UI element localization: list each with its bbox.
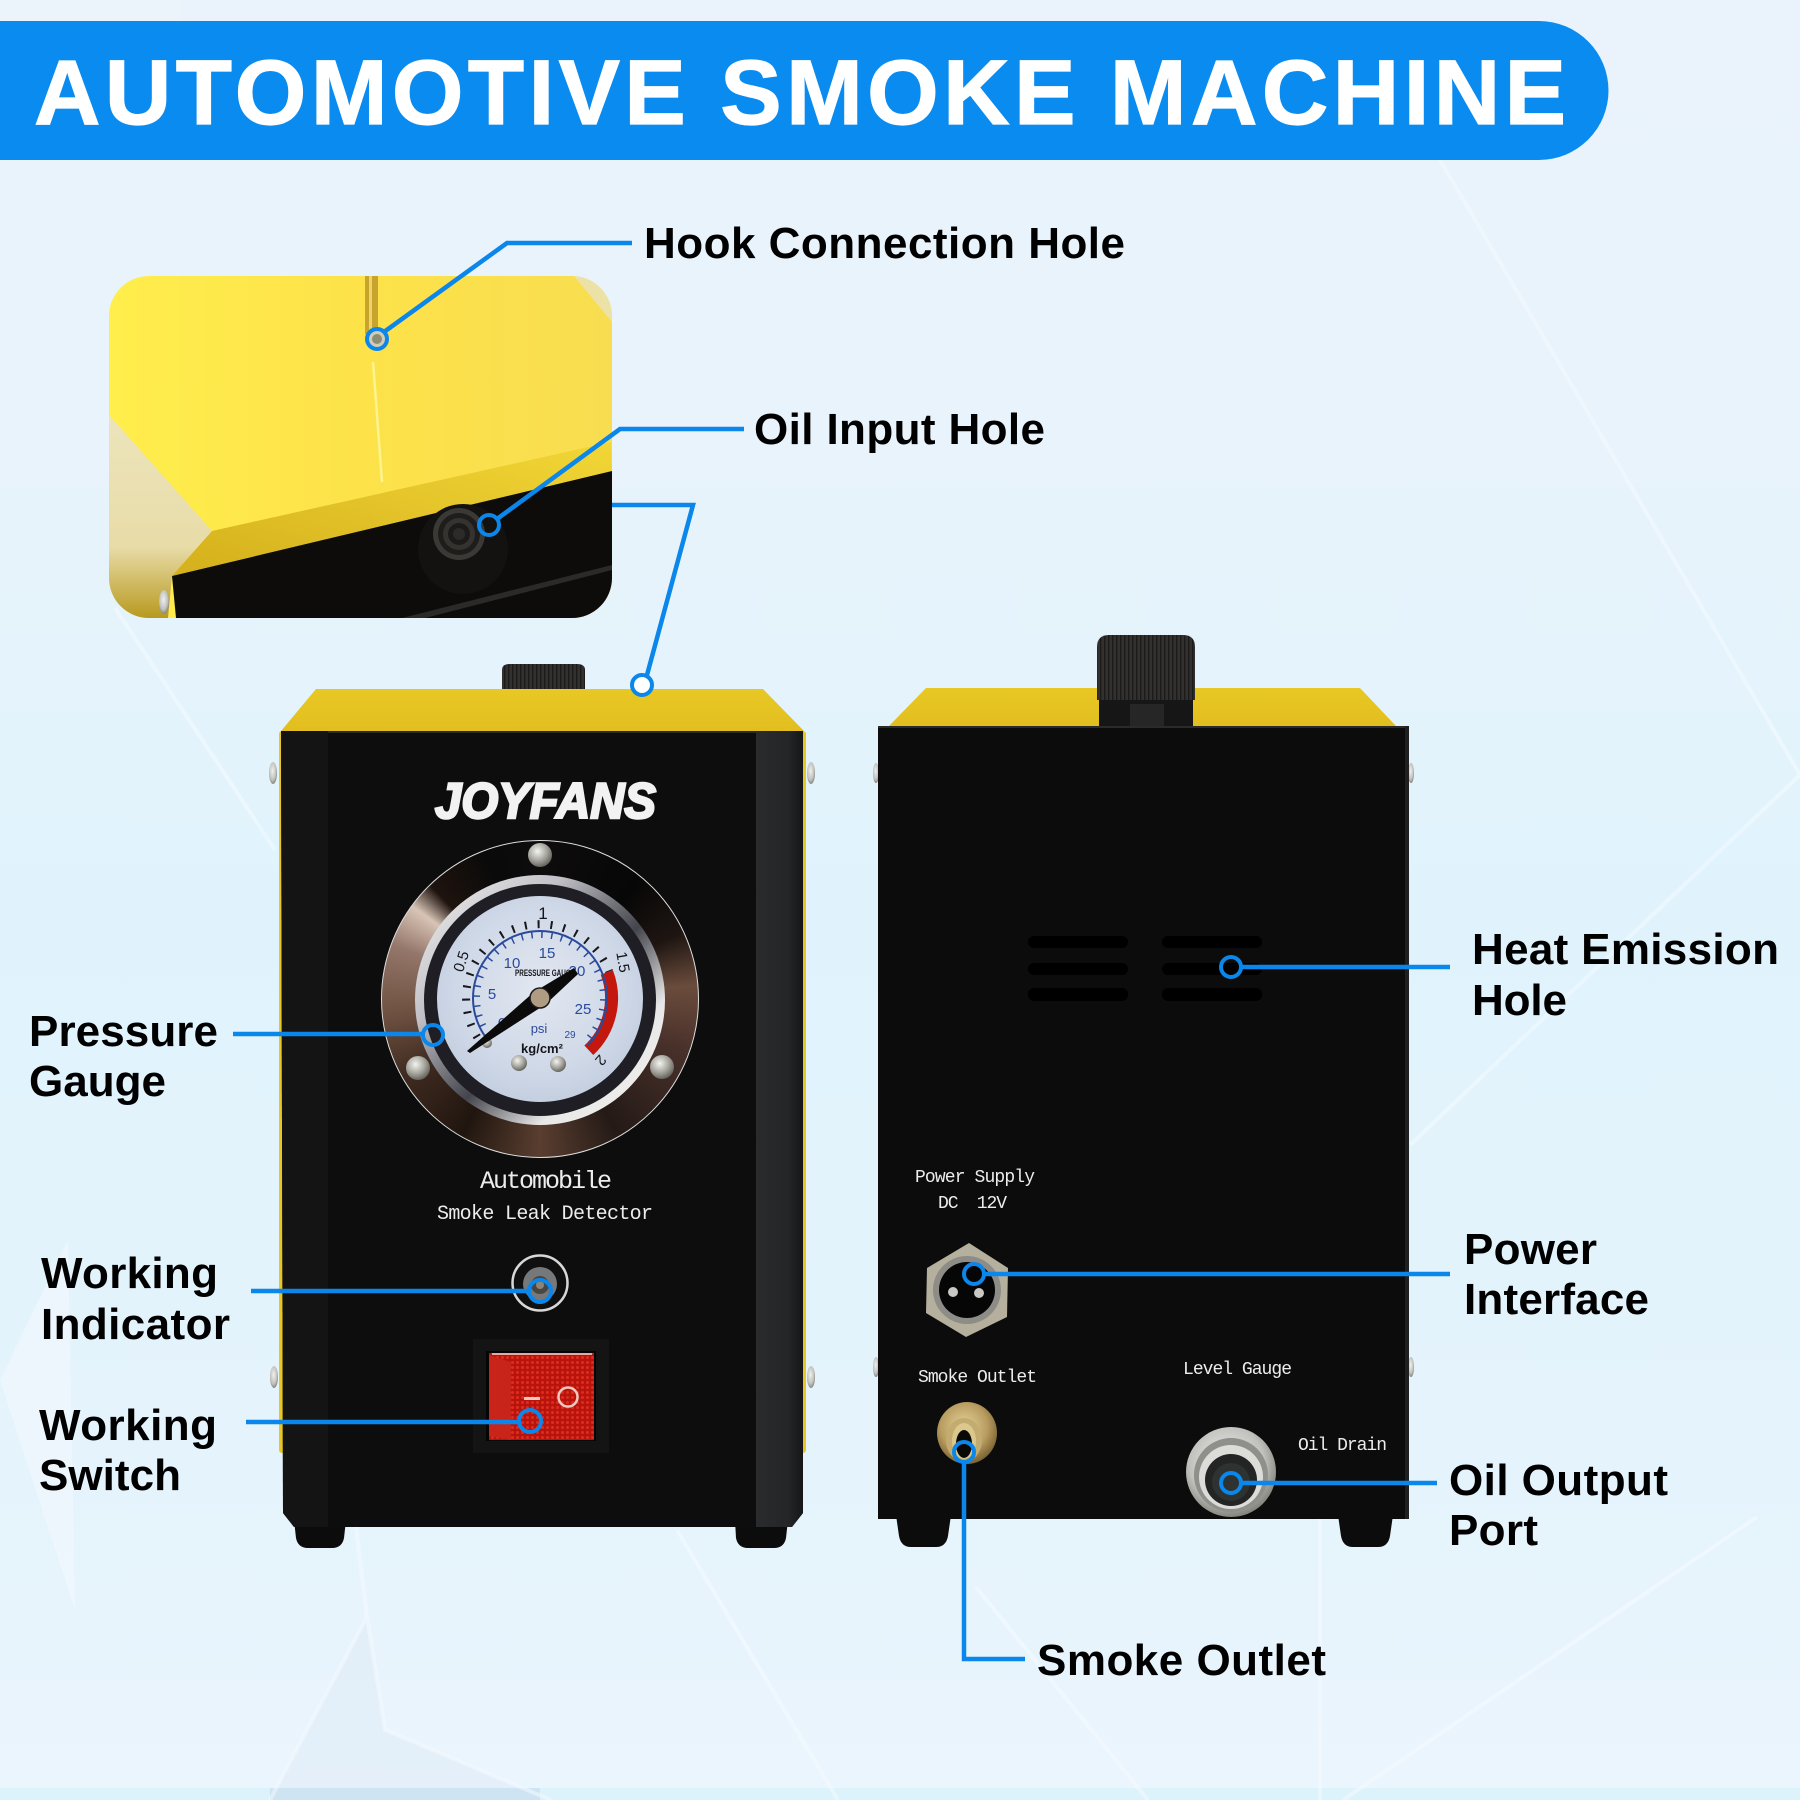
oil output port [1186,1427,1276,1517]
power supply text: Power Supply [915,1168,1035,1188]
working indicator lamp [512,1256,568,1310]
left panel [281,731,328,1527]
smoke outlet text: Smoke Outlet [918,1368,1037,1388]
dial numbers: 1.5 [612,950,633,974]
rocker switch [473,1339,609,1453]
oil drain text: Oil Drain [1298,1436,1387,1456]
connector: inset to machine [612,505,693,695]
callout: working indicator: Working [41,1249,218,1298]
oil input nut [436,504,472,514]
callout: oil output port: Port [1449,1506,1538,1555]
dial numbers [450,904,633,1069]
callout: power interface: Interface [1464,1275,1649,1324]
side screws [873,763,1414,1377]
front text: Automobile [480,1167,612,1196]
body [281,731,803,1527]
knob [1097,635,1195,700]
feet [294,1520,788,1548]
dial numbers: 2 [591,1051,610,1069]
dial numbers: 1 [538,904,548,923]
callout: power interface [964,1225,1649,1324]
callout: smoke outlet [954,1442,1326,1685]
dial numbers: 5 [488,986,496,1003]
callout: oil input hole [479,405,1045,535]
callout: heat emission hole: Heat Emission [1472,925,1779,974]
flange screws [406,843,674,1080]
yellow top cover [281,689,804,731]
left machine: front view [269,664,815,1548]
callout: pressure gauge: Pressure [29,1007,218,1056]
callout: working indicator: Indicator [41,1300,230,1349]
dial face [437,896,643,1102]
hook rod [365,276,378,334]
right machine: rear view: DC 12V [938,1194,1007,1214]
red zone [589,972,612,1050]
callout: hook connection hole: Hook Connection Hole [644,219,1125,268]
black scale [466,924,609,1037]
dial numbers: 25 [575,1001,591,1018]
logo: JOYFANS [435,773,656,829]
right machine: rear view [873,635,1414,1547]
callout: pressure gauge [29,1007,443,1106]
dial numbers: psi [531,1021,547,1036]
right panel [756,731,803,1527]
callout: heat emission hole: Hole [1472,976,1567,1025]
blue scale [473,931,607,1045]
side screws [269,762,815,1388]
title: AUTOMOTIVE SMOKE MACHINE [34,42,1566,144]
callout: working indicator [41,1249,551,1349]
callout: heat emission hole [1221,925,1779,1025]
feet [896,1515,1393,1547]
needle [467,968,578,1053]
brass smoke outlet [937,1402,997,1464]
dial numbers: 20 [569,963,585,980]
callout: working switch [39,1401,541,1500]
callout: oil output port: Oil Output [1449,1456,1668,1505]
screw on inset side [159,590,169,614]
dial numbers: kg/cm² [521,1041,564,1056]
dial screws [482,1038,566,1072]
callout: oil output port [1221,1456,1668,1555]
power connector [926,1243,1008,1337]
title banner [0,21,1608,160]
callout: hook connection hole [367,219,1125,349]
dial numbers: 29 [564,1030,576,1041]
needle hub [530,988,550,1008]
body [878,726,1409,1519]
level gauge text: Level Gauge [1183,1360,1292,1380]
dial numbers: 0 [498,1015,506,1032]
left machine: front view: Smoke Leak Detector [437,1203,653,1226]
callout: power interface: Power [1464,1225,1597,1274]
top knob [502,664,585,689]
callout: working switch: Working [39,1401,217,1450]
pressure gauge [381,840,699,1158]
knob collar [1099,700,1193,726]
bezel ring [415,875,665,1125]
dial numbers: PRESSURE GAUGE [515,968,575,978]
flange [381,840,699,1158]
dial numbers: 15 [539,945,555,962]
heat vents [1028,936,1262,1001]
hook nut [365,331,385,347]
callout: working switch: Switch [39,1451,181,1500]
inset photo: top of the machine [109,276,612,618]
callout: oil input hole: Oil Input Hole [754,405,1045,454]
callout: smoke outlet: Smoke Outlet [1037,1636,1326,1685]
dial numbers: 10 [504,955,520,972]
yellow top cover [889,688,1396,726]
callout: pressure gauge: Gauge [29,1057,166,1106]
yellow side strips [279,731,806,1453]
dial numbers: 0.5 [450,949,473,974]
